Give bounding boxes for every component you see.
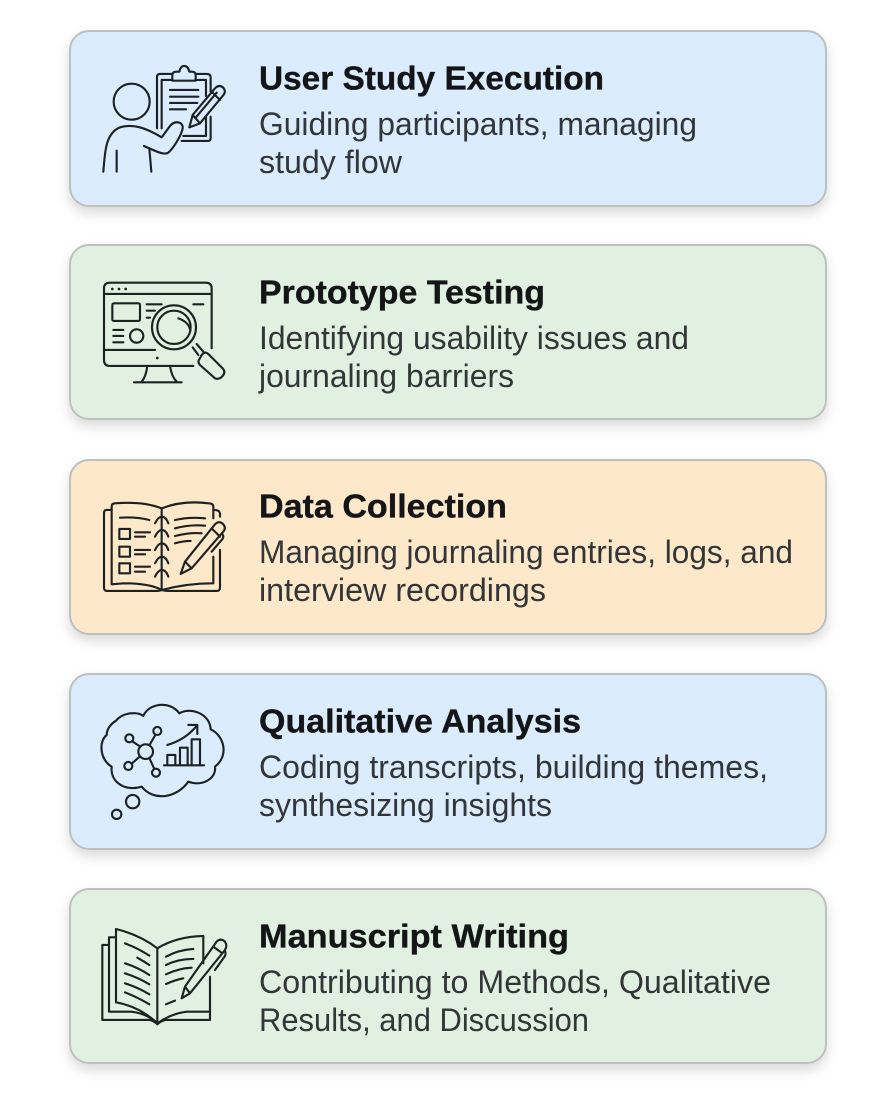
- description: Coding transcripts, building themes,: [259, 749, 768, 785]
- description: Identifying usability issues and: [259, 320, 689, 356]
- heading: User Study Execution: [259, 60, 604, 96]
- icon: spiral notebook with pencil: [104, 502, 225, 591]
- heading: Qualitative Analysis: [259, 702, 581, 740]
- description: synthesizing insights: [259, 787, 552, 823]
- heading: Prototype Testing: [259, 274, 545, 310]
- card background: [70, 31, 826, 206]
- description: study flow: [259, 144, 403, 180]
- icon: monitor with magnifier: [104, 283, 224, 382]
- icon: thought cloud with network and chart: [101, 705, 224, 819]
- heading: Data Collection: [259, 488, 507, 524]
- description: journaling barriers: [258, 358, 514, 394]
- panel: Data Collection: [70, 460, 826, 634]
- description: Guiding participants, managing: [259, 106, 697, 142]
- icon: person presenting clipboard: [103, 66, 225, 172]
- panel: Qualitative Analysis: [70, 674, 826, 849]
- description: Results, and Discussion: [259, 1002, 589, 1038]
- description: interview recordings: [259, 572, 546, 608]
- description: Contributing to Methods, Qualitative: [259, 964, 771, 1000]
- panel: Manuscript Writing: [70, 889, 826, 1063]
- card background: [70, 889, 826, 1063]
- heading: Manuscript Writing: [259, 918, 569, 954]
- icon: open book with pen: [102, 929, 226, 1024]
- description: Managing journaling entries, logs, and: [259, 534, 793, 570]
- card background: [70, 460, 826, 634]
- card background: [70, 245, 826, 419]
- card background: [70, 674, 826, 849]
- panel: Prototype Testing: [70, 245, 826, 419]
- panel: User Study Execution: [70, 31, 826, 206]
